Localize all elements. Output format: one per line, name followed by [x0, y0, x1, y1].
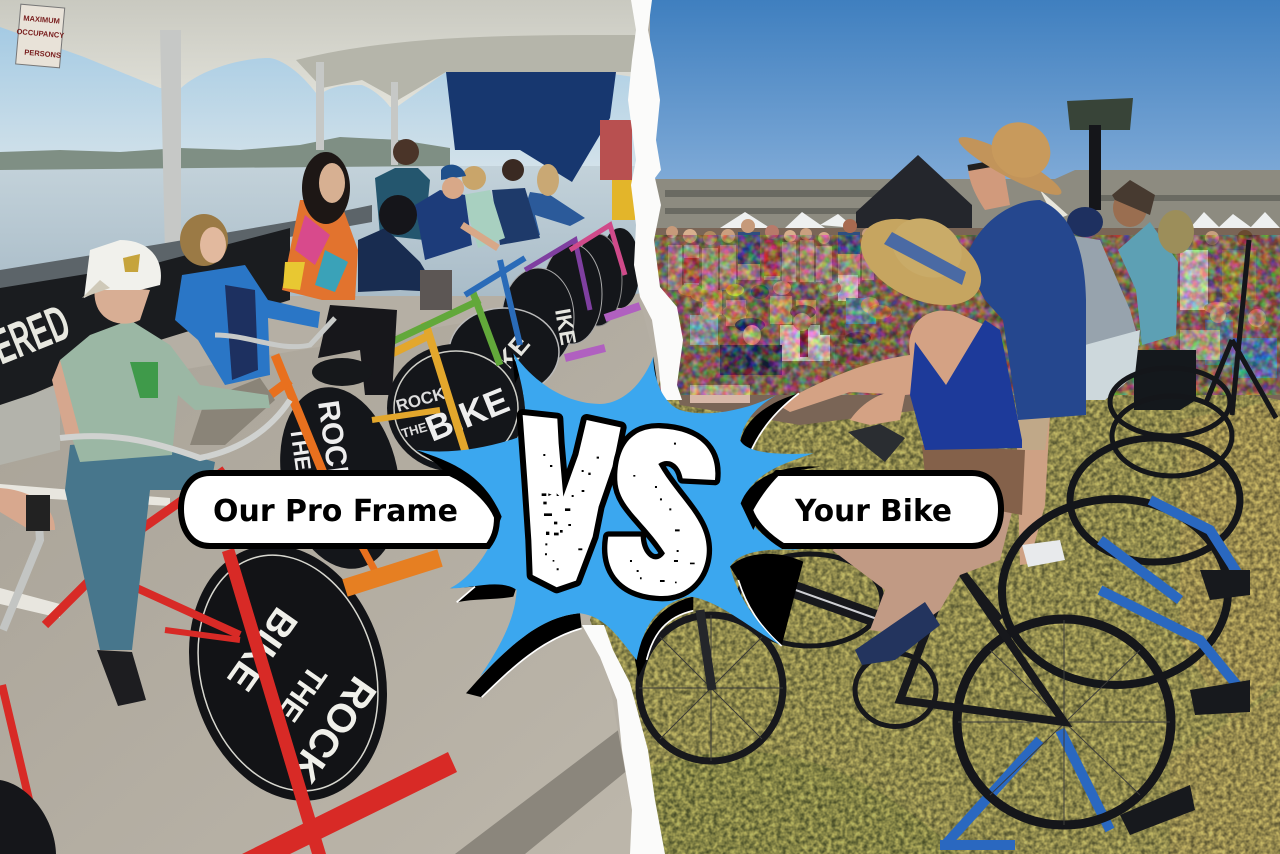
dry grass patches right bottom	[1170, 690, 1280, 854]
bike frame black	[745, 545, 1064, 726]
wheel: yellow bike: THE	[400, 419, 429, 441]
occupancy sign: OCCUPANCY	[16, 27, 65, 40]
trainer feet, black	[1120, 570, 1250, 835]
stone fort wall	[650, 170, 1280, 232]
wheels of the far bikes: KE	[490, 329, 536, 376]
starburst blue body	[417, 353, 813, 677]
occupancy sign	[14, 4, 67, 68]
wheel: yellow bike	[387, 344, 525, 472]
crescent around left pill tip	[417, 450, 502, 547]
person: woman in blue tank top with straw hat	[778, 201, 1025, 665]
black vendor tent	[856, 155, 972, 228]
torn paper divider, lower	[582, 625, 665, 854]
pill label: Our Pro Frame	[181, 473, 497, 546]
orange bike frame and base	[268, 353, 443, 597]
wheels of the far bikes: IKE	[550, 307, 581, 347]
person: man in grey shirt	[1040, 190, 1140, 400]
crescent around right pill tip	[741, 466, 821, 530]
pill label: Your Bike: Your Bike	[794, 494, 952, 529]
silver handlebar	[60, 400, 290, 458]
wheel: yellow bike: ROCK	[394, 384, 448, 416]
silver handlebar orange bike	[215, 318, 335, 347]
green bike frame	[385, 290, 500, 365]
white ground strips	[0, 484, 170, 618]
starburst shadow white edge	[457, 393, 799, 697]
person: boy navy jacket	[358, 195, 452, 310]
wheel: red bike, front: THE	[271, 659, 333, 727]
black banner	[0, 228, 290, 408]
pill label: Our Pro Frame: Our Pro Frame	[213, 494, 458, 529]
grass field	[590, 380, 1280, 854]
wheels behind the woman	[738, 368, 1240, 685]
barrier rail	[0, 205, 372, 290]
wheel: yellow bike: BIKE	[420, 379, 515, 449]
wheels of the far bikes	[449, 228, 640, 396]
person: boy in white cap and green shirt	[52, 240, 270, 706]
stage light on pole	[1067, 98, 1133, 210]
seated and standing crowd	[666, 219, 1277, 403]
torn paper divider, upper	[628, 0, 683, 400]
concrete ground	[0, 294, 640, 568]
letter V	[523, 415, 621, 587]
wheel: red bike, front: BIKE	[219, 600, 305, 698]
tripod	[1205, 240, 1276, 418]
tent poles	[160, 30, 398, 243]
person: boy blue jacket	[175, 214, 320, 445]
starburst badge	[417, 352, 821, 697]
black equipment case	[1134, 350, 1196, 410]
far yellow barrier	[612, 180, 635, 220]
person: kids at the back row	[415, 159, 585, 260]
pill label: Your Bike	[750, 473, 1001, 546]
trainer stands, blue	[940, 500, 1245, 845]
far shore and hills	[0, 137, 450, 170]
grass texture	[590, 395, 1280, 854]
blue curtain	[446, 72, 616, 182]
partial wheel bottom-left	[0, 780, 56, 854]
panel: left photo, pro frames under tent	[0, 0, 660, 854]
person: girl tie dye hoodie	[282, 152, 397, 395]
canopy shadow underside	[296, 35, 635, 100]
bike seat	[312, 358, 364, 386]
far booth	[600, 120, 632, 180]
white vendor tents	[720, 212, 1280, 240]
bay water	[0, 166, 660, 296]
wheel: orange bike	[280, 387, 398, 569]
ground shadow	[455, 730, 626, 854]
wheel: orange bike: THE	[285, 425, 316, 472]
occupancy sign: MAXIMUM	[23, 13, 60, 26]
large black trainer bike wheel	[957, 619, 1171, 825]
person: standing adult teal shirt	[375, 139, 430, 240]
blue bike frame	[465, 258, 525, 345]
starburst shadow crescents	[450, 352, 803, 697]
wheel: red bike, front: ROCK	[281, 669, 384, 790]
wheel: red bike, front	[189, 549, 387, 800]
wheel: orange bike: ROCK	[311, 398, 356, 491]
crowd texture	[655, 235, 1280, 395]
dry grass patches lower	[640, 752, 960, 854]
front-left silver bar and hand	[0, 488, 55, 630]
sky over the bay	[0, 27, 636, 166]
tent canopy	[0, 0, 640, 107]
red bike frame front	[2, 470, 457, 854]
person: man in navy shirt with straw hat	[954, 112, 1086, 567]
VS lettering	[523, 415, 715, 596]
clear blue sky	[590, 0, 1280, 190]
dry grass patches	[1180, 400, 1280, 720]
letter S	[607, 428, 715, 596]
yellow bike frame	[372, 321, 469, 450]
occupancy sign: PERSONS	[24, 48, 61, 60]
panel: right photo, your bike on trainers	[590, 0, 1280, 854]
purple and pink bike frames	[525, 225, 640, 358]
metal fence	[0, 385, 60, 465]
person: man in plaid shirt with hat on back	[1112, 180, 1194, 345]
fort windows	[665, 190, 1280, 214]
crowd base	[650, 228, 1280, 425]
front wheel of the foreground bike	[639, 610, 783, 761]
